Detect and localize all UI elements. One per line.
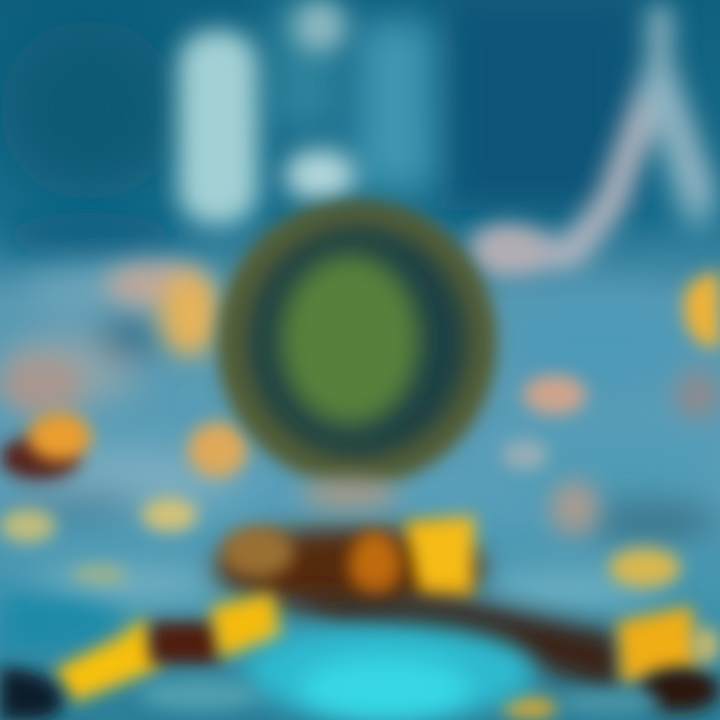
coin dark ring [248,226,468,458]
line chart peak, upper right [490,16,700,255]
icon: coin [217,200,497,509]
middle haze and market lines [0,266,720,604]
brown and gold ribbon, bottom [55,516,720,719]
teal left foreground with dark corner [0,595,130,720]
upper background: dark panels and pale columns [0,0,640,257]
coin rim [217,200,497,486]
soft orange and gold lights [0,226,720,588]
coin base glow [300,481,400,509]
cyan pool, bottom centre [140,624,535,720]
coin centre emblem [280,254,420,426]
